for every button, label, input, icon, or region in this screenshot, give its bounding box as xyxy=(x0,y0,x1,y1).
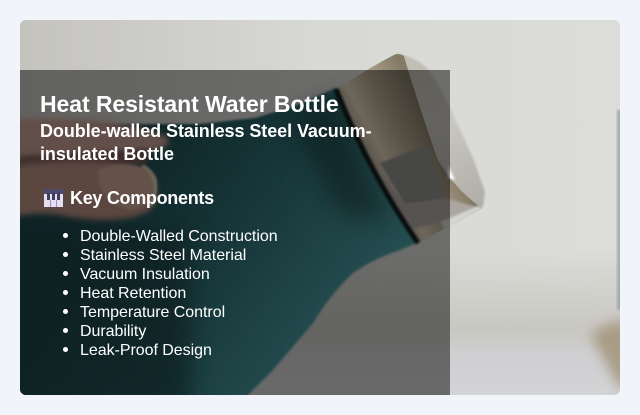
cap lower rim xyxy=(440,206,483,230)
thumbnail xyxy=(98,164,157,210)
list: key components: Heat Retention xyxy=(80,285,186,302)
shadow beside gasket xyxy=(290,95,392,222)
finger crease xyxy=(20,150,150,168)
subtitle: Double-walled Stainless Steel Vacuum- xyxy=(40,121,372,141)
list: key components: Vacuum Insulation xyxy=(80,266,210,283)
bottle cap face xyxy=(396,54,485,225)
thumb xyxy=(5,161,157,220)
title: Heat Resistant Water Bottle xyxy=(40,91,339,117)
subtitle: insulated Bottle xyxy=(40,144,174,164)
list: key components: Stainless Steel Material xyxy=(80,247,246,264)
list: key components: Temperature Control xyxy=(80,304,225,321)
list: key components: Durability xyxy=(80,323,146,340)
gasket xyxy=(336,89,418,243)
dark shading bottom left xyxy=(0,230,190,410)
subtitle xyxy=(40,121,372,164)
list: key components: Double-Walled Construction xyxy=(80,228,278,245)
list: key components xyxy=(63,228,278,359)
heading: key components: Key Components xyxy=(70,188,214,208)
blurred object at right xyxy=(590,322,630,395)
bottle collar xyxy=(339,54,482,242)
icon: piano keys xyxy=(44,189,63,207)
text overlay panel xyxy=(20,70,450,395)
background floor xyxy=(20,250,620,395)
list: key components: Leak-Proof Design xyxy=(80,342,212,359)
bottle body xyxy=(0,88,417,400)
upper finger xyxy=(5,119,168,162)
